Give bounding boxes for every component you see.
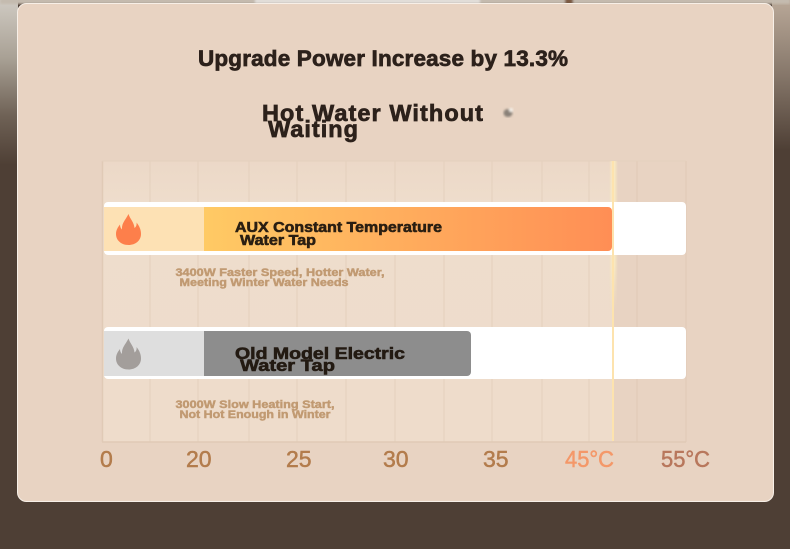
caption: old model: Not Hot Enough in Winter [180, 409, 331, 421]
axis labels: 20 [186, 446, 212, 472]
axis labels: 30 [383, 446, 409, 472]
bar label [235, 345, 405, 375]
caption: AUX [176, 267, 384, 289]
axis labels: 55°C [661, 446, 710, 472]
title: Upgrade Power Increase by 13.3% [198, 46, 568, 71]
subtitle: Hot Water Without [262, 100, 483, 126]
caption: AUX: 3400W Faster Speed, Hotter Water, [176, 267, 384, 279]
icon: orange flame [116, 214, 141, 245]
subtitle [262, 100, 483, 142]
axis labels: 25 [286, 446, 312, 472]
bar: AUX constant temperature tap [104, 202, 686, 255]
marker glow [610, 161, 616, 294]
axis labels: 35 [483, 446, 509, 472]
caption: old model: 3000W Slow Heating Start, [176, 399, 334, 411]
icon: grey flame [116, 338, 141, 370]
chart: temperature comparison [100, 161, 710, 472]
smudge mark [504, 108, 513, 117]
bar label: AUX Constant Temperature [235, 220, 442, 236]
axis labels [100, 446, 710, 472]
bar: old model tap [104, 327, 686, 379]
45°C marker line [612, 161, 614, 441]
bar label: Water Tap [240, 233, 316, 249]
caption: AUX: Meeting Winter Water Needs [180, 277, 348, 289]
chart plot background [102, 161, 686, 442]
bar label [235, 220, 442, 249]
caption: old model [176, 399, 334, 421]
axis labels: 0 [100, 446, 113, 472]
bar label: Water Tap [240, 357, 335, 375]
axis labels: 45°C [565, 446, 614, 472]
subtitle: Waiting [268, 116, 358, 142]
bar label: Old Model Electric [235, 345, 405, 363]
